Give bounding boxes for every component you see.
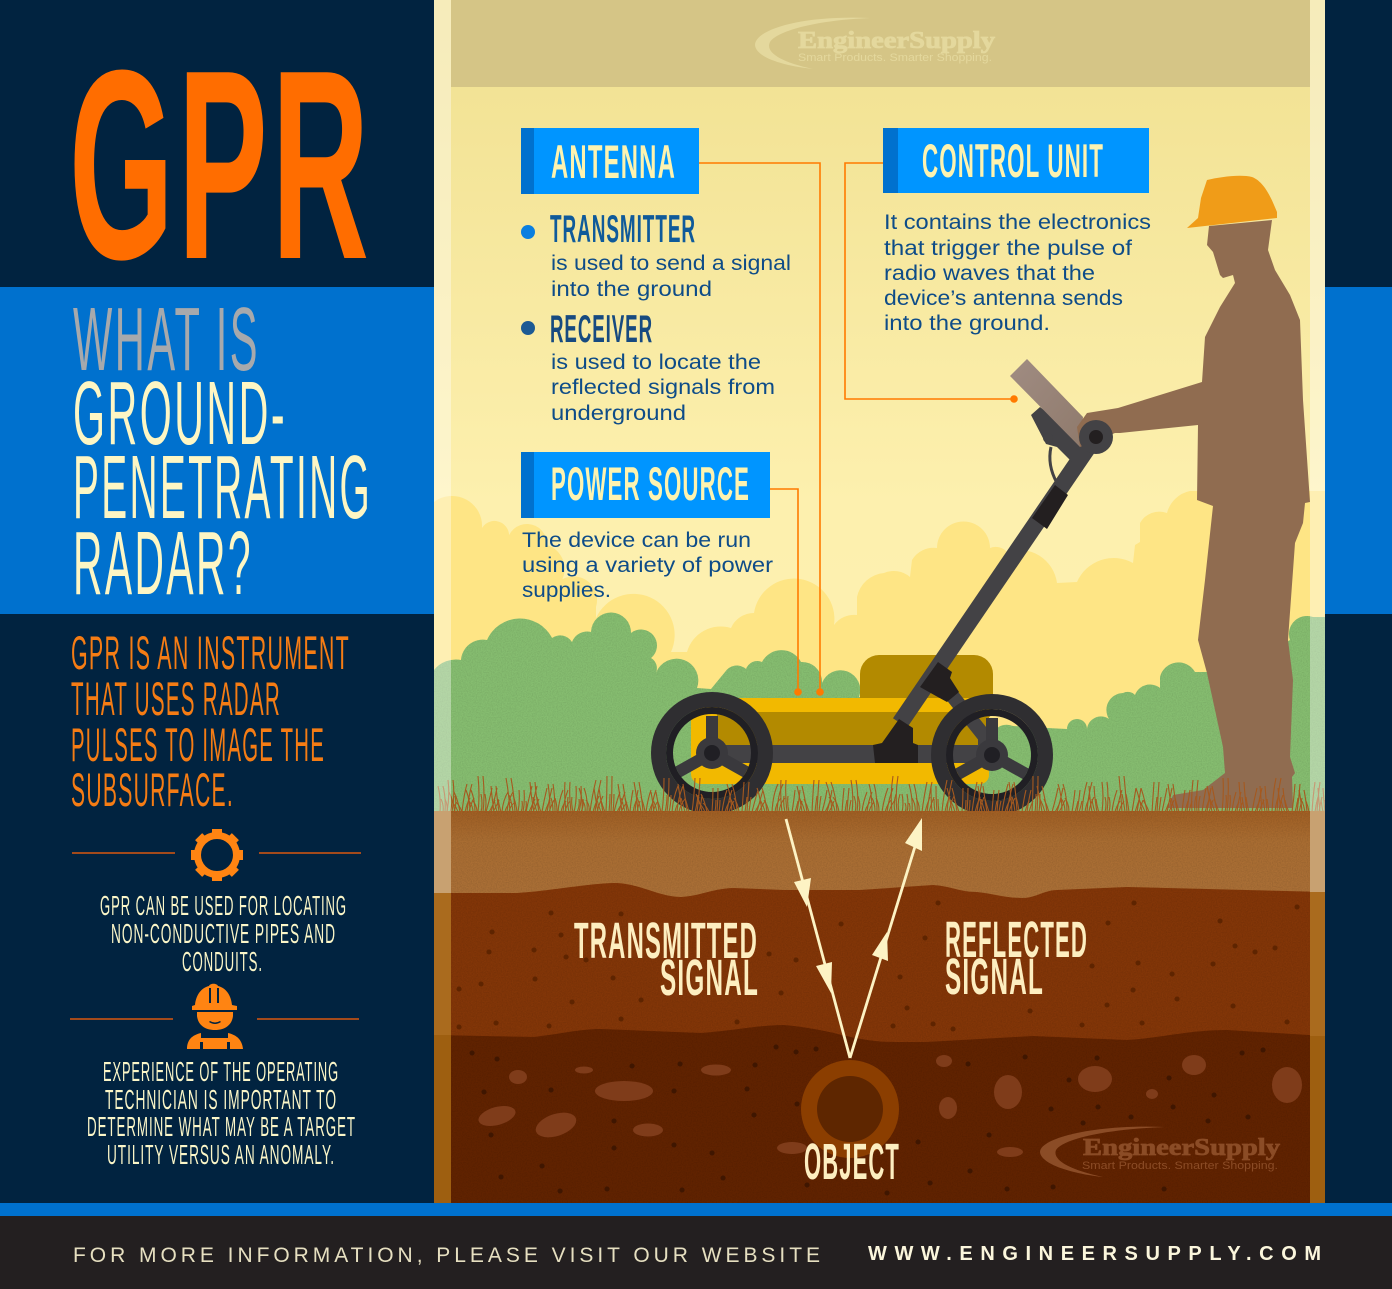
panel: illustration: SIGNAL bbox=[660, 949, 759, 1006]
arrow: reflected signal bbox=[850, 818, 922, 1058]
logo bottom: EngineerSupply bbox=[1083, 1135, 1280, 1161]
receiver: RECEIVER bbox=[550, 308, 653, 351]
axle bbox=[712, 745, 991, 763]
left panel: GPR CAN BE USED FOR LOCATING bbox=[100, 890, 347, 921]
transmitter: into the ground bbox=[551, 278, 712, 301]
heading: what is ground-penetrating radar bbox=[73, 290, 372, 614]
text: locating pipes: CONDUITS. bbox=[182, 946, 263, 977]
receiver: underground bbox=[551, 402, 686, 425]
callout: power source: using a variety of power bbox=[522, 554, 773, 577]
text: locating pipes bbox=[100, 890, 347, 977]
receiver: reflected signals from bbox=[551, 376, 775, 399]
callout: power source: The device can be run bbox=[522, 529, 751, 552]
footer: WWW.ENGINEERSUPPLY.COM bbox=[868, 1243, 1321, 1265]
orange definition text: SUBSURFACE. bbox=[71, 763, 234, 816]
callout: control unit: that trigger the pulse of bbox=[884, 237, 1132, 260]
callout: antenna bbox=[521, 128, 791, 425]
icon: gear bbox=[72, 829, 361, 881]
left panel bbox=[69, 15, 373, 1170]
icon: worker bbox=[70, 984, 359, 1049]
receiver bbox=[521, 308, 775, 425]
clouds bbox=[434, 491, 1325, 729]
label: reflected signal bbox=[946, 921, 1086, 994]
callout: control unit: It contains the electronics bbox=[884, 211, 1151, 234]
callout: power source: POWER SOURCE bbox=[551, 457, 750, 510]
sky bbox=[434, 0, 1325, 652]
side margins bbox=[434, 0, 1325, 1203]
handle foot and clamps bbox=[873, 485, 1068, 763]
left panel: DETERMINE WHAT MAY BE A TARGET bbox=[87, 1111, 356, 1142]
text: GPR bbox=[69, 15, 373, 316]
left panel: EXPERIENCE OF THE OPERATING bbox=[103, 1056, 339, 1087]
footer: FOR MORE INFORMATION, PLEASE VISIT OUR WEBSITE bbox=[73, 1244, 820, 1267]
panel: illustration: REFLECTED bbox=[945, 911, 1088, 968]
footer bbox=[0, 1203, 1392, 1289]
soil specks bbox=[459, 903, 1297, 1029]
grass bbox=[438, 776, 1327, 812]
console bbox=[1031, 407, 1079, 460]
callout: power source bbox=[521, 452, 773, 602]
operator silhouette bbox=[1077, 176, 1310, 808]
logo top: EngineerSupply bbox=[798, 28, 995, 54]
handle bbox=[900, 437, 1095, 723]
callout: control unit: into the ground. bbox=[884, 312, 1050, 335]
rear box bbox=[860, 655, 993, 718]
callout: control unit: radio waves that the bbox=[884, 262, 1095, 285]
arrow: transmitted signal bbox=[786, 819, 850, 1058]
callout: control unit bbox=[883, 128, 1151, 335]
callout: control unit: device’s antenna sends bbox=[884, 287, 1123, 310]
text: operator experience: TECHNICIAN IS IMPORTANT TO bbox=[105, 1084, 337, 1115]
orange definition text bbox=[71, 626, 350, 816]
transmitter bbox=[521, 208, 791, 301]
wheels bbox=[658, 700, 766, 806]
callout: control unit: CONTROL UNIT bbox=[922, 134, 1104, 187]
transmitter: is used to send a signal bbox=[551, 252, 791, 275]
label: reflected signal: SIGNAL bbox=[945, 948, 1044, 1005]
label: transmitted signal bbox=[574, 922, 758, 996]
receiver: is used to locate the bbox=[551, 351, 761, 374]
bushes bbox=[434, 613, 1325, 812]
callout lines bbox=[699, 163, 1017, 695]
soil layers bbox=[434, 811, 1325, 1203]
callout: power source: supplies. bbox=[522, 579, 611, 602]
text: PENETRATING bbox=[73, 438, 372, 538]
object bbox=[801, 1060, 899, 1158]
text: operator experience: UTILITY VERSUS AN ANOMALY. bbox=[107, 1139, 335, 1170]
logo bottom: Smart Products. Smarter Shopping. bbox=[1082, 1160, 1278, 1172]
logo bottom bbox=[1040, 1127, 1280, 1177]
heading: what is ground-penetrating radar: GROUND- bbox=[73, 364, 287, 464]
hard hat bbox=[1187, 176, 1277, 228]
text: locating pipes: NON-CONDUCTIVE PIPES AND bbox=[111, 918, 336, 949]
left panel: PULSES TO IMAGE THE bbox=[71, 718, 325, 771]
panel: illustration bbox=[434, 0, 1327, 1203]
text: operator experience bbox=[87, 1056, 356, 1170]
text: GPR IS AN INSTRUMENT bbox=[71, 626, 350, 679]
top band bbox=[451, 0, 1310, 87]
yellow antenna box bbox=[691, 698, 989, 784]
heading: what is ground-penetrating radar: RADAR? bbox=[73, 514, 253, 614]
callout: antenna: ANTENNA bbox=[551, 135, 676, 188]
soil stones bbox=[476, 1055, 1302, 1157]
logo top: Smart Products. Smarter Shopping. bbox=[798, 52, 992, 64]
heading: what is ground-penetrating radar: WHAT IS bbox=[73, 290, 260, 390]
transmitter: TRANSMITTER bbox=[550, 208, 696, 251]
panel: illustration: TRANSMITTED bbox=[574, 912, 758, 969]
panel: illustration: OBJECT bbox=[804, 1133, 900, 1190]
orange definition text: THAT USES RADAR bbox=[71, 672, 281, 725]
scanner device bbox=[658, 359, 1095, 808]
logo top bbox=[755, 18, 995, 69]
